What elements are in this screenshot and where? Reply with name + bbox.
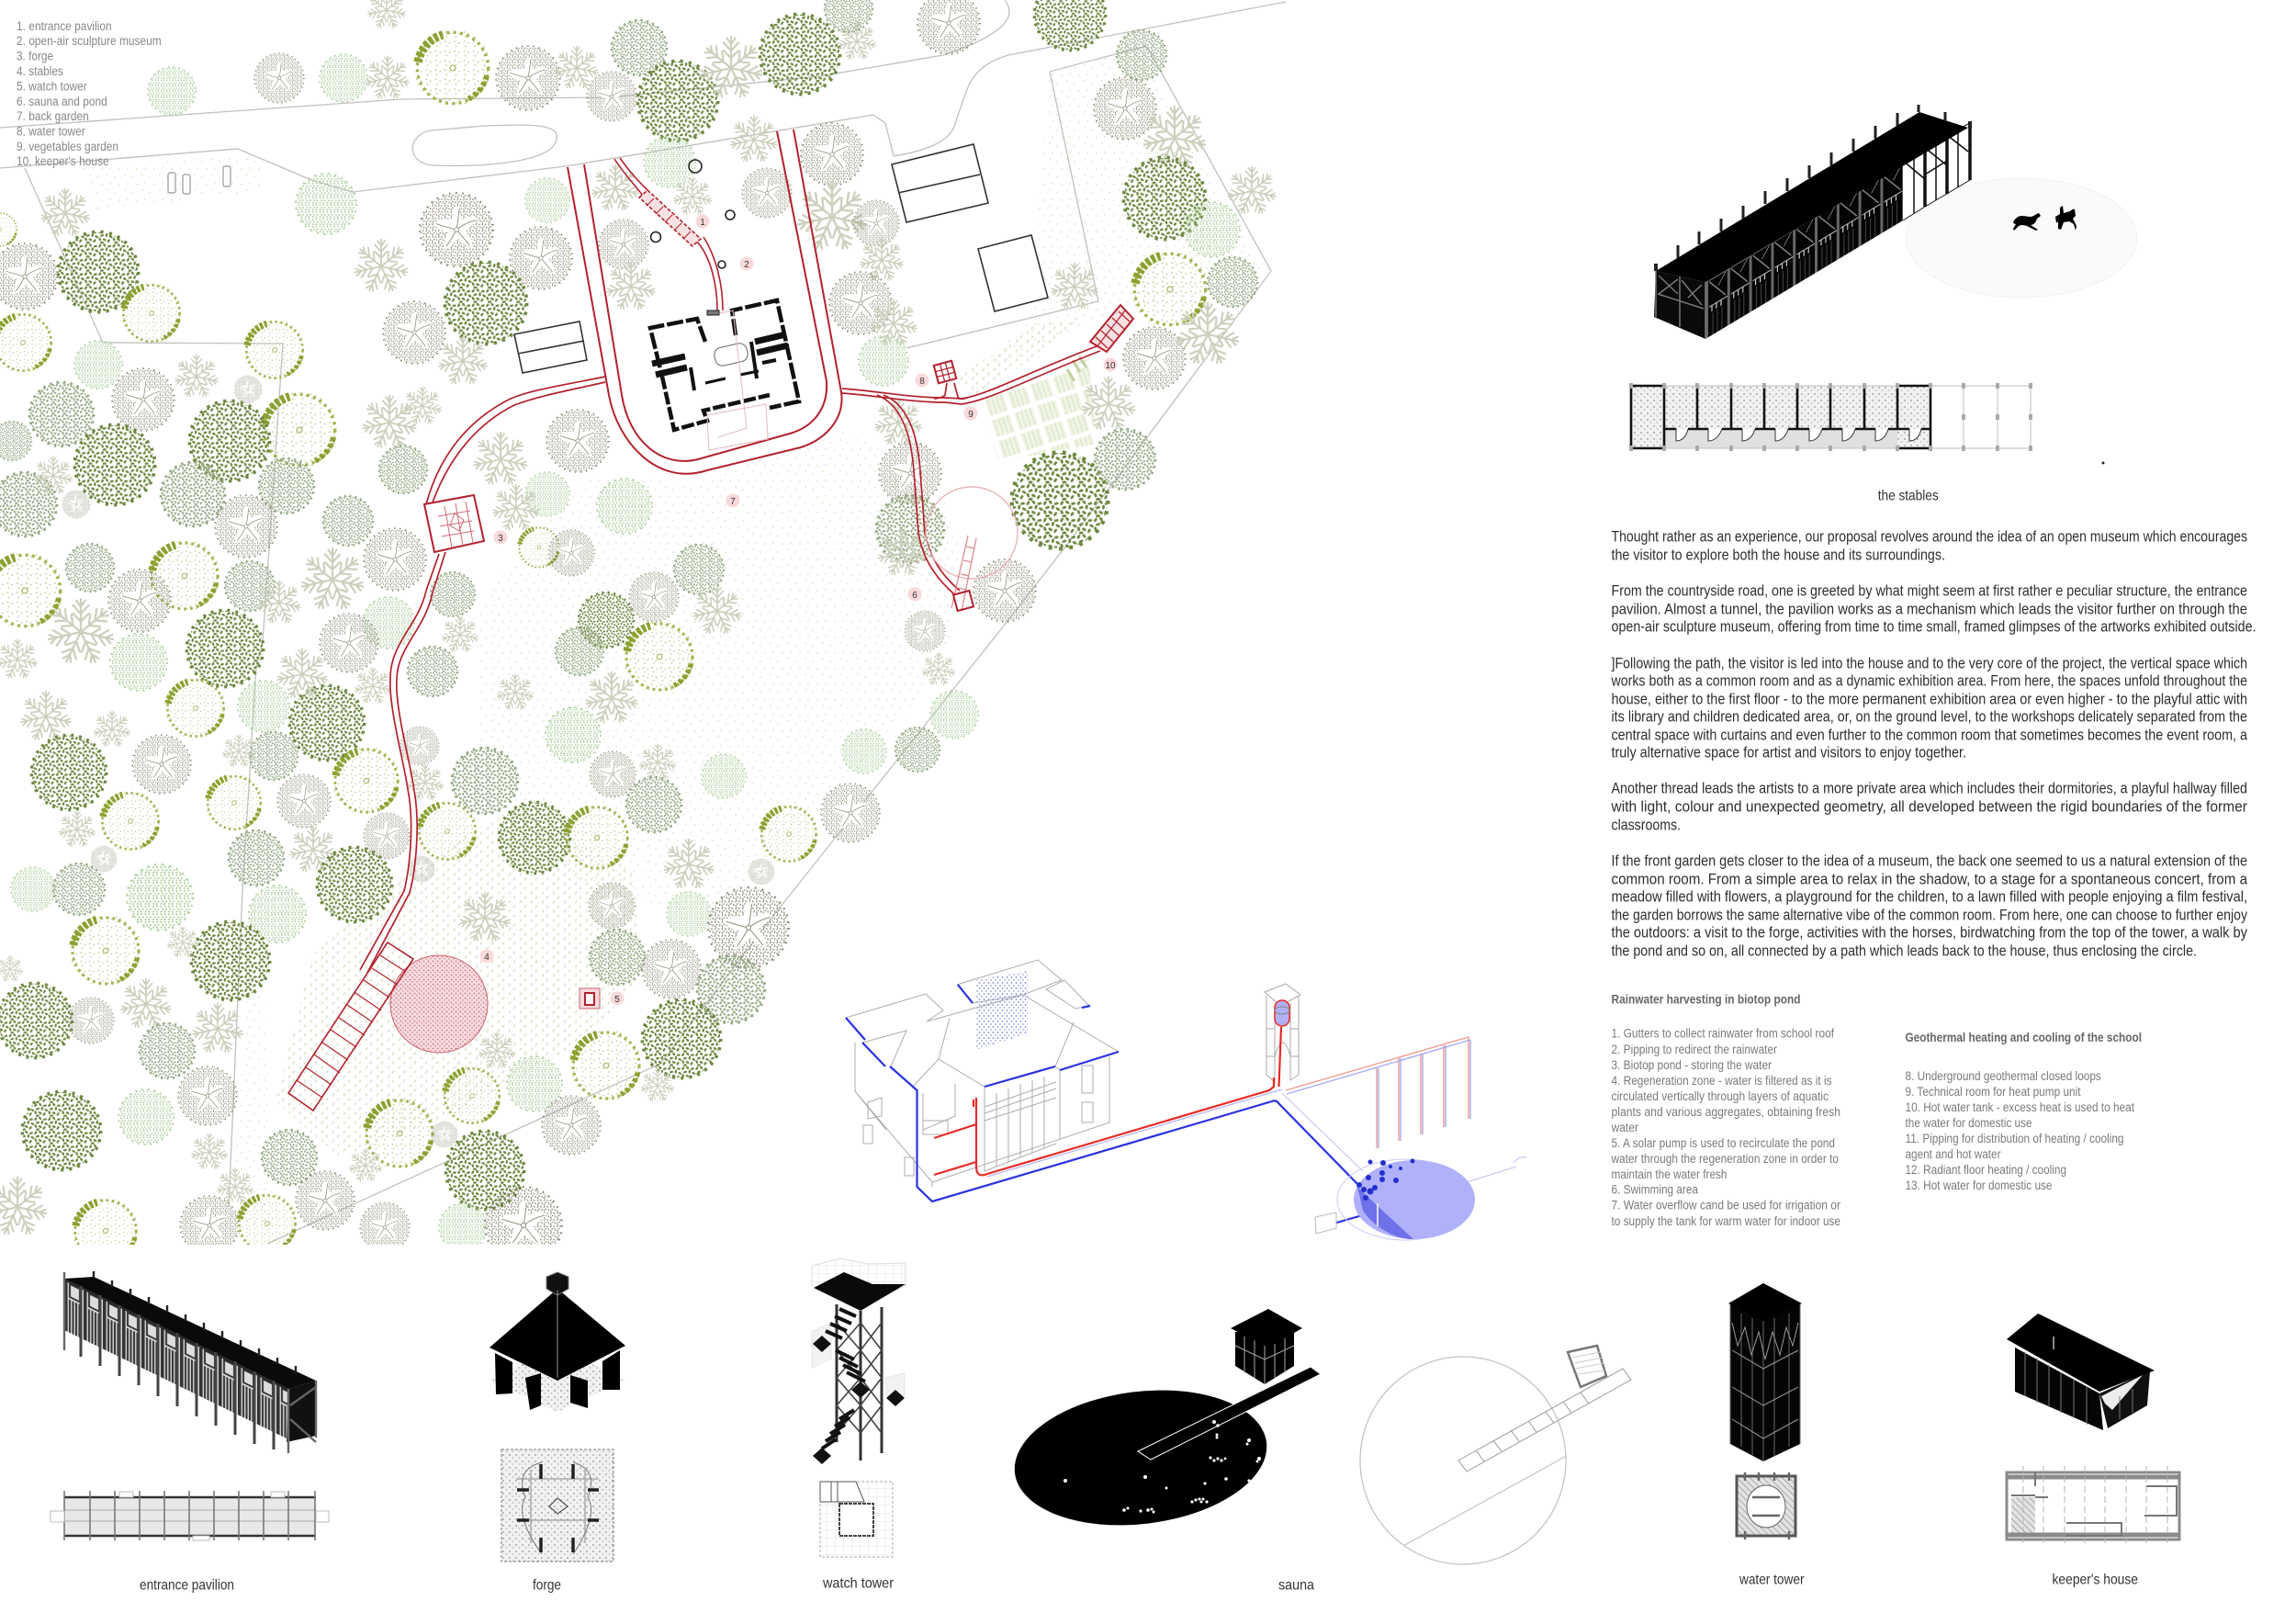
diagram: rainwater and geothermal systems xyxy=(846,960,1526,1240)
paragraph 4: with light, colour and unexpected geometry, all developed between the rigid boundaries of the former xyxy=(1611,799,2247,816)
caption: the stables: the stables xyxy=(1878,489,1939,503)
text: geothermal heating list: agent and hot water xyxy=(1905,1147,2001,1161)
stables plan xyxy=(1631,383,2105,465)
end facade frame xyxy=(1656,271,1705,339)
legend: numbered list of places: 3. forge xyxy=(17,50,53,62)
caption: keeper's house: keeper's house xyxy=(2052,1573,2138,1587)
plan number markers: 7 xyxy=(730,497,736,507)
text: rainwater harvesting list: water through the regeneration zone in order to xyxy=(1611,1152,1839,1166)
paragraph 5 xyxy=(1611,852,2248,959)
plan number markers: 8 xyxy=(919,377,925,387)
text: rainwater harvesting list: to supply the tank for warm water for indoor use xyxy=(1611,1214,1840,1228)
forge footprint xyxy=(424,495,484,552)
paragraph 1: the visitor to explore both the house and its surroundings. xyxy=(1611,547,1945,564)
rear posts xyxy=(1656,105,1970,271)
caption: watch tower: watch tower xyxy=(822,1576,895,1591)
forge axonometric xyxy=(490,1272,625,1412)
pond flora xyxy=(1064,1420,1261,1514)
text: geothermal heating list xyxy=(1905,1031,2142,1192)
red path to forge and stables xyxy=(360,377,605,973)
text: rainwater harvesting list: 6. Swimming area xyxy=(1611,1183,1698,1196)
sauna axonometric xyxy=(1007,1309,1321,1539)
plan number markers: 6 xyxy=(912,591,917,601)
pond xyxy=(1337,1159,1475,1240)
legend: numbered list of places: 1. entrance pavilion xyxy=(17,19,112,33)
vegetables garden xyxy=(982,356,1097,462)
cars xyxy=(168,166,231,194)
keeper's house footprint xyxy=(1090,305,1133,352)
roads and property boundary xyxy=(0,0,1286,1244)
text: geothermal heating list: 11. Pipping for distribution of heating / cooling xyxy=(1905,1132,2123,1145)
plan number markers: 2 xyxy=(744,260,749,270)
plan number markers: 3 xyxy=(498,534,503,544)
roof rain hatch xyxy=(976,971,1028,1050)
caption: water tower: water tower xyxy=(1739,1573,1805,1587)
geothermal loops xyxy=(1286,1037,1470,1148)
arena xyxy=(1906,178,2137,298)
water tower plan xyxy=(1737,1472,1795,1539)
watch tower axonometric xyxy=(812,1258,906,1464)
text: geothermal heating list: 8. Underground geothermal closed loops xyxy=(1905,1069,2101,1083)
paragraph 4 xyxy=(1611,781,2247,834)
paragraph 4: classrooms. xyxy=(1611,818,1681,834)
plan number markers: 10 xyxy=(1105,361,1116,371)
text: geothermal heating list: 12. Radiant floor heating / cooling xyxy=(1905,1163,2066,1177)
text: rainwater harvesting list: 1. Gutters to collect rainwater from school roof xyxy=(1611,1027,1834,1040)
legend: numbered list of places: 2. open-air sculpture museum xyxy=(17,34,162,48)
end facade xyxy=(1654,271,1705,339)
stables clearing grass xyxy=(230,808,643,1231)
forge plan xyxy=(501,1449,613,1562)
stables axonometric xyxy=(1654,105,2137,339)
house outline xyxy=(846,960,1119,1187)
legend: numbered list of places: 10. keeper's house xyxy=(17,154,109,168)
trees: west xyxy=(0,188,743,648)
plan number markers: 4 xyxy=(484,953,490,963)
water tower in diagram xyxy=(1265,984,1300,1082)
caption: entrance pavilion: entrance pavilion xyxy=(140,1578,234,1593)
text: rainwater harvesting list: plants and various aggregates, obtaining fresh xyxy=(1611,1105,1840,1119)
horses xyxy=(2013,206,2077,231)
entrance pavilion axonometric xyxy=(64,1271,316,1453)
pump box xyxy=(1315,1212,1336,1234)
pale overflow pipe xyxy=(1282,1093,1526,1182)
entrance pavilion plan xyxy=(51,1491,329,1540)
water tower axonometric xyxy=(1728,1283,1802,1461)
text: geothermal heating list: Geothermal heating and cooling of the school xyxy=(1905,1031,2142,1044)
caption: sauna: sauna xyxy=(1278,1578,1314,1593)
main house plan xyxy=(650,300,799,450)
red pipe shadow xyxy=(987,1089,1282,1177)
roof xyxy=(1656,112,1968,282)
paragraph 5: the pond and so on, all connected by a path which leads back to the house, thus enclosing the circle. xyxy=(1611,942,2197,959)
sheds xyxy=(514,144,1048,373)
tank xyxy=(1275,1000,1289,1026)
text: geothermal heating list: 13. Hot water for domestic use xyxy=(1905,1179,2052,1192)
legend: numbered list of places: 9. vegetables garden xyxy=(17,140,118,153)
text: project description xyxy=(1611,529,2256,959)
sauna plan xyxy=(1360,1346,1631,1564)
long facade xyxy=(1705,161,1903,339)
legend: numbered list of places: 8. water tower xyxy=(17,125,85,138)
trees: south xyxy=(0,598,978,1264)
legend: numbered list of places: 7. back garden xyxy=(17,109,89,123)
keeper's house axonometric xyxy=(2007,1314,2155,1430)
text: rainwater harvesting list xyxy=(1611,992,1840,1228)
back garden meadow xyxy=(83,46,1263,919)
text: geothermal heating list: 10. Hot water tank - excess heat is used to heat xyxy=(1905,1100,2134,1114)
text: rainwater harvesting list: 5. A solar pump is used to recirculate the pond xyxy=(1611,1136,1835,1150)
plan number markers: 9 xyxy=(968,410,974,420)
text: rainwater harvesting list: maintain the water fresh xyxy=(1611,1167,1727,1181)
paragraph 3 xyxy=(1611,656,2248,761)
paragraph 5: common room. From a simple area to relax in the shadow, to a stage for a spontaneous concert, from a xyxy=(1611,871,2248,887)
caption: forge: forge xyxy=(533,1578,561,1593)
legend: numbered list of places xyxy=(17,19,162,168)
paragraph 3: truly alternative space for artist and visitors to enjoy together. xyxy=(1611,744,1966,761)
blue pipe xyxy=(846,985,1366,1224)
entrance pavilion footprint xyxy=(614,158,723,310)
paragraph 1 xyxy=(1611,529,2247,564)
legend: numbered list of places: 5. watch tower xyxy=(17,79,87,94)
watch tower plan xyxy=(820,1482,893,1557)
text: rainwater harvesting list: Rainwater harvesting in biotop pond xyxy=(1611,992,1800,1007)
keeper's house plan xyxy=(2007,1466,2179,1547)
text: rainwater harvesting list: 3. Biotop pond - storing the water xyxy=(1611,1058,1772,1072)
water tower footprint xyxy=(934,361,956,383)
text: rainwater harvesting list: 2. Pipping to redirect the rainwater xyxy=(1611,1043,1777,1056)
red perimeter path around the house xyxy=(568,130,842,474)
text: rainwater harvesting list: 4. Regeneration zone - water is filtered as it is xyxy=(1611,1074,1832,1088)
text: rainwater harvesting list: circulated vertically through layers of aquatic xyxy=(1611,1089,1829,1103)
text: geothermal heating list: the water for domestic use xyxy=(1905,1116,2032,1130)
panel: site plan xyxy=(0,0,1286,1264)
open end structure xyxy=(1903,123,1970,220)
pond plants xyxy=(1356,1159,1414,1201)
sculpture markers xyxy=(650,160,735,268)
text: rainwater harvesting list: water xyxy=(1611,1121,1638,1134)
legend: numbered list of places: 6. sauna and pond xyxy=(17,95,107,108)
red pipe xyxy=(934,1027,1281,1175)
sauna footprint xyxy=(926,487,1018,611)
plan number markers: 1 xyxy=(700,218,705,228)
red path to keeper's house, water tower and sauna xyxy=(842,346,1100,594)
stables footprint xyxy=(288,942,488,1111)
plan number markers: 5 xyxy=(614,995,620,1005)
trees: north and east xyxy=(148,0,1277,651)
paragraph 2 xyxy=(1611,582,2256,636)
watch tower footprint xyxy=(580,988,600,1009)
text: rainwater harvesting list: 7. Water overflow cand be used for irrigation or xyxy=(1611,1198,1840,1212)
text: geothermal heating list: 9. Technical room for heat pump unit xyxy=(1905,1085,2081,1099)
plan number markers xyxy=(479,215,1117,1005)
legend: numbered list of places: 4. stables xyxy=(17,64,63,78)
